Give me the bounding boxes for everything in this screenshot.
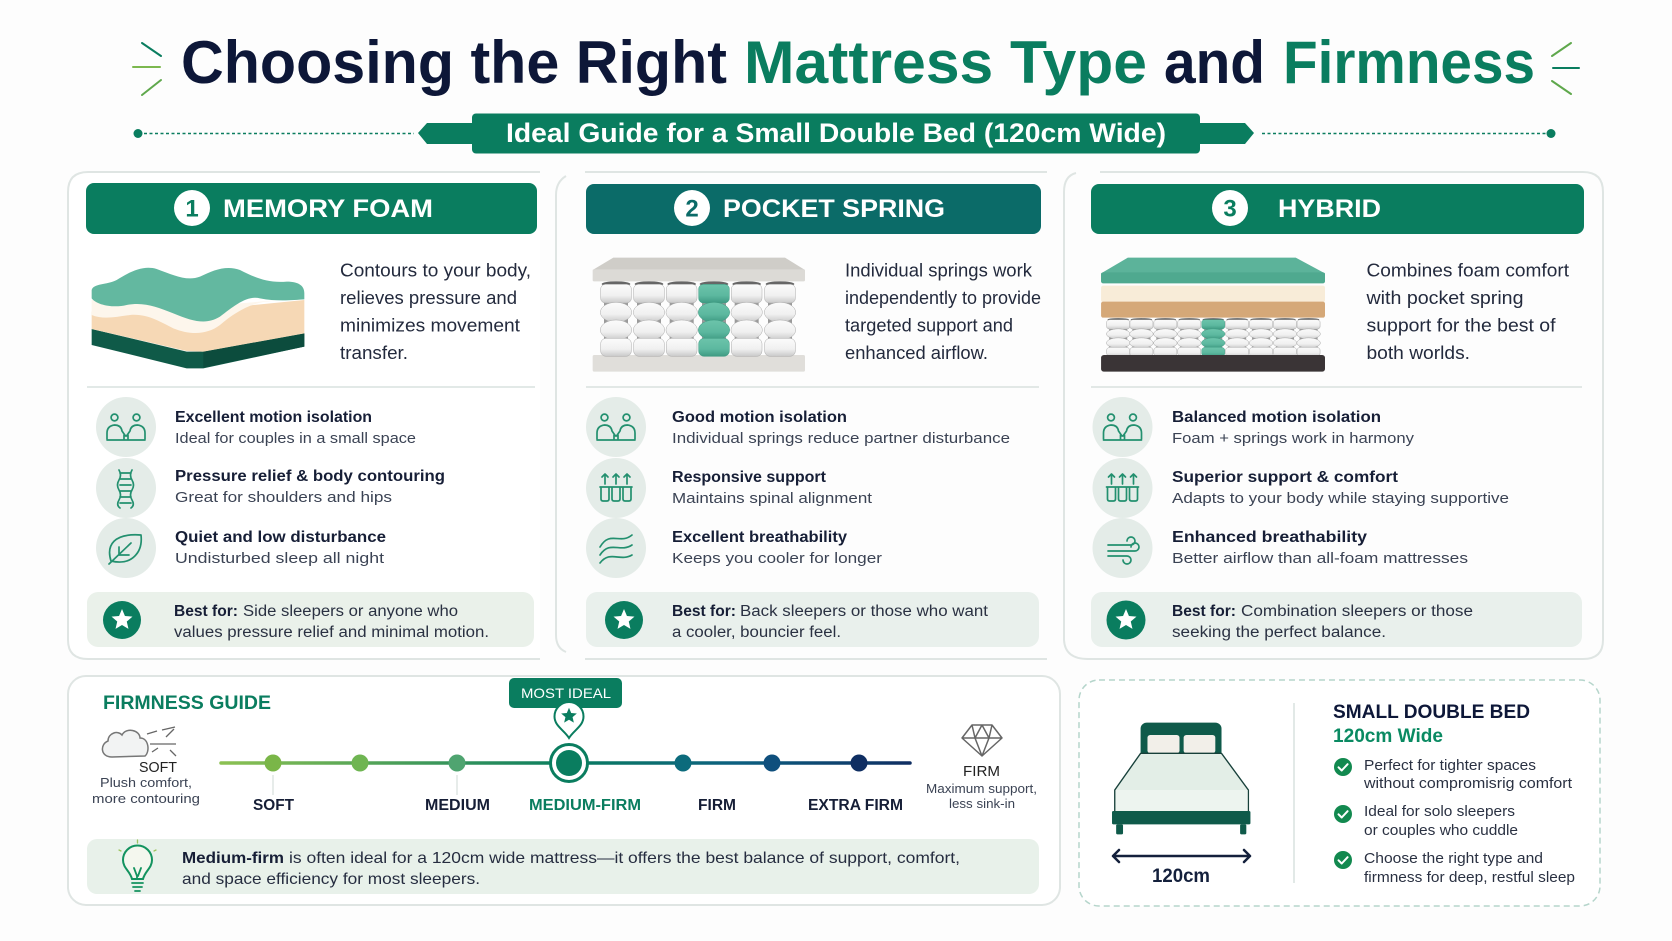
feature: motion isolation: Excellent motion isolation	[175, 409, 372, 426]
callout: best for memory foam: values pressure relief and minimal motion.	[174, 624, 489, 641]
feature: pressure relief	[96, 458, 445, 518]
feature: responsive support: Maintains spinal alignment	[672, 490, 873, 507]
heading: memory foam: 1	[185, 196, 199, 222]
feature: motion isolation	[1092, 397, 1415, 457]
feature: pressure relief: Great for shoulders and hips	[175, 489, 392, 506]
label: 120cm: 120cm	[1152, 866, 1210, 887]
title: Firmness	[1283, 29, 1535, 96]
subtitle ribbon	[418, 114, 1254, 154]
callout: best for memory foam	[87, 592, 534, 647]
dotted rule: left	[134, 129, 414, 138]
heading: small double bed	[1333, 702, 1530, 747]
badge: most ideal: MOST IDEAL	[521, 685, 611, 701]
feature: quiet: Undisturbed sleep all night	[175, 550, 385, 567]
feature: breathability: Excellent breathability	[672, 529, 847, 546]
checklist item: tighter spaces: without compromisrig comfort	[1363, 776, 1572, 792]
description: memory foam	[340, 260, 531, 363]
soft end label: SOFT	[139, 760, 177, 776]
title: Mattress Type	[744, 29, 1147, 96]
callout: best for hybrid	[1091, 592, 1582, 647]
soft end label	[92, 760, 200, 806]
firm end label: less sink-in	[949, 796, 1015, 811]
feature: breathability	[586, 518, 882, 578]
description: pocket spring: enhanced airflow.	[845, 342, 988, 363]
feature: breathability: Enhanced breathability	[1172, 529, 1367, 546]
heading: memory foam: MEMORY FOAM	[223, 195, 433, 223]
description: hybrid: support for the best of	[1366, 314, 1556, 336]
description: hybrid	[1365, 260, 1569, 363]
description: memory foam: transfer.	[340, 342, 408, 363]
feature: support and comfort	[1092, 458, 1509, 518]
callout: best for pocket spring	[586, 592, 1039, 647]
panel: hybrid	[1064, 172, 1603, 659]
firmness scale: MEDIUM	[425, 797, 490, 814]
feature: motion isolation: Foam + springs work in harmony	[1172, 430, 1415, 447]
description: hybrid: Combines foam comfort	[1366, 260, 1569, 280]
heading: memory foam	[86, 183, 537, 234]
heading: hybrid	[1091, 184, 1584, 234]
callout: best for pocket spring: Best for:	[672, 603, 736, 620]
firmness scale: SOFT	[253, 797, 295, 814]
badge: most ideal	[509, 678, 622, 738]
callout: best for memory foam: Side sleepers or anyone who	[243, 603, 458, 620]
feature: quiet	[96, 518, 386, 578]
firmness scale: EXTRA FIRM	[808, 797, 903, 814]
icon: diamond	[962, 725, 1002, 756]
illustration: pocket spring unit	[593, 258, 805, 372]
checklist item: solo sleepers: Ideal for solo sleepers	[1364, 804, 1515, 820]
description: memory foam: minimizes movement	[340, 314, 520, 336]
title: Choosing the Right	[181, 29, 727, 96]
checklist item: right type: Choose the right type and	[1364, 851, 1543, 867]
callout: medium-firm tip: and space efficiency for most sleepers.	[182, 871, 480, 888]
description: pocket spring	[845, 260, 1041, 363]
callout: best for pocket spring: Back sleepers or those who want	[740, 603, 989, 620]
feature: quiet: Quiet and low disturbance	[175, 529, 386, 546]
heading: hybrid: 3	[1223, 196, 1237, 222]
description: memory foam: relieves pressure and	[340, 287, 517, 308]
panel: small double bed	[1079, 680, 1600, 906]
panel: memory foam	[68, 172, 540, 659]
title	[181, 29, 1535, 96]
panel: firmness guide	[68, 676, 1060, 905]
icon: right title rays	[1552, 43, 1579, 94]
description: hybrid: both worlds.	[1366, 342, 1470, 363]
firmness scale: MEDIUM-FIRM	[529, 797, 641, 814]
soft end label: Plush comfort,	[100, 775, 192, 790]
firm end label: FIRM	[963, 764, 1000, 780]
checklist item: tighter spaces: Perfect for tighter spaces	[1364, 758, 1536, 774]
callout: best for memory foam: Best for:	[174, 603, 238, 620]
illustration: memory foam layers	[92, 268, 304, 368]
panel: pocket spring	[556, 172, 1047, 659]
feature: motion isolation	[96, 397, 416, 457]
callout: best for hybrid: Combination sleepers or those	[1241, 603, 1473, 620]
feature: motion isolation: Good motion isolation	[672, 409, 847, 426]
soft end label: more contouring	[92, 791, 200, 806]
firm end label	[926, 764, 1037, 811]
icon: light bulb	[119, 840, 156, 891]
heading: pocket spring: 2	[685, 196, 699, 222]
feature: responsive support: Responsive support	[672, 469, 826, 486]
feature: motion isolation	[586, 397, 1010, 457]
icon: left title rays	[133, 43, 161, 95]
illustration: hybrid layers	[1101, 258, 1325, 372]
description: pocket spring: targeted support and	[845, 314, 1013, 336]
heading: firmness guide: FIRMNESS GUIDE	[103, 693, 271, 714]
icon: cloud	[102, 727, 176, 757]
feature: breathability: Better airflow than all-foam mattresses	[1172, 550, 1468, 567]
feature: motion isolation: Ideal for couples in a small space	[175, 430, 416, 447]
description: pocket spring: independently to provide	[845, 287, 1041, 308]
callout: medium-firm tip: Medium-firm	[182, 850, 284, 867]
heading: pocket spring: POCKET SPRING	[723, 195, 945, 223]
description: hybrid: with pocket spring	[1365, 287, 1524, 308]
heading: small double bed: 120cm Wide	[1333, 726, 1443, 747]
feature: pressure relief: Pressure relief & body contouring	[175, 468, 445, 485]
heading: small double bed: SMALL DOUBLE BED	[1333, 702, 1530, 723]
subtitle ribbon: Ideal Guide for a Small Double Bed (120cm Wide)	[506, 118, 1166, 148]
callout: best for hybrid: seeking the perfect balance.	[1172, 624, 1386, 641]
checklist item: solo sleepers: or couples who cuddle	[1364, 823, 1518, 839]
callout: best for hybrid: Best for:	[1172, 603, 1236, 620]
callout: medium-firm tip	[87, 839, 1039, 894]
heading: pocket spring	[586, 184, 1041, 234]
title: and	[1164, 29, 1265, 96]
illustration: bed	[1112, 723, 1250, 834]
feature: support and comfort: Superior support & comfort	[1172, 469, 1398, 486]
feature: breathability	[1092, 518, 1468, 578]
callout: medium-firm tip: is often ideal for a 120cm wide mattress—it offers the best balance of support, comfort,	[289, 850, 960, 867]
feature: breathability: Keeps you cooler for longer	[672, 550, 882, 567]
checklist item: right type	[1334, 851, 1575, 886]
description: pocket spring: Individual springs work	[845, 260, 1033, 280]
checklist item: solo sleepers	[1334, 804, 1518, 839]
feature: support and comfort: Adapts to your body while staying supportive	[1172, 490, 1509, 507]
firmness scale	[221, 744, 910, 814]
firm end label: Maximum support,	[926, 781, 1037, 796]
feature: motion isolation: Individual springs reduce partner disturbance	[672, 430, 1010, 447]
firmness scale: FIRM	[698, 797, 736, 814]
checklist item: tighter spaces	[1334, 758, 1572, 792]
heading: hybrid: HYBRID	[1278, 195, 1381, 223]
feature: responsive support	[586, 458, 873, 518]
dotted rule: right	[1262, 129, 1556, 138]
checklist item: right type: firmness for deep, restful sleep	[1364, 870, 1575, 886]
arrow: bed width	[1113, 850, 1250, 862]
description: memory foam: Contours to your body,	[340, 260, 531, 280]
feature: motion isolation: Balanced motion isolation	[1172, 409, 1381, 426]
callout: best for pocket spring: a cooler, bouncier feel.	[672, 624, 841, 641]
